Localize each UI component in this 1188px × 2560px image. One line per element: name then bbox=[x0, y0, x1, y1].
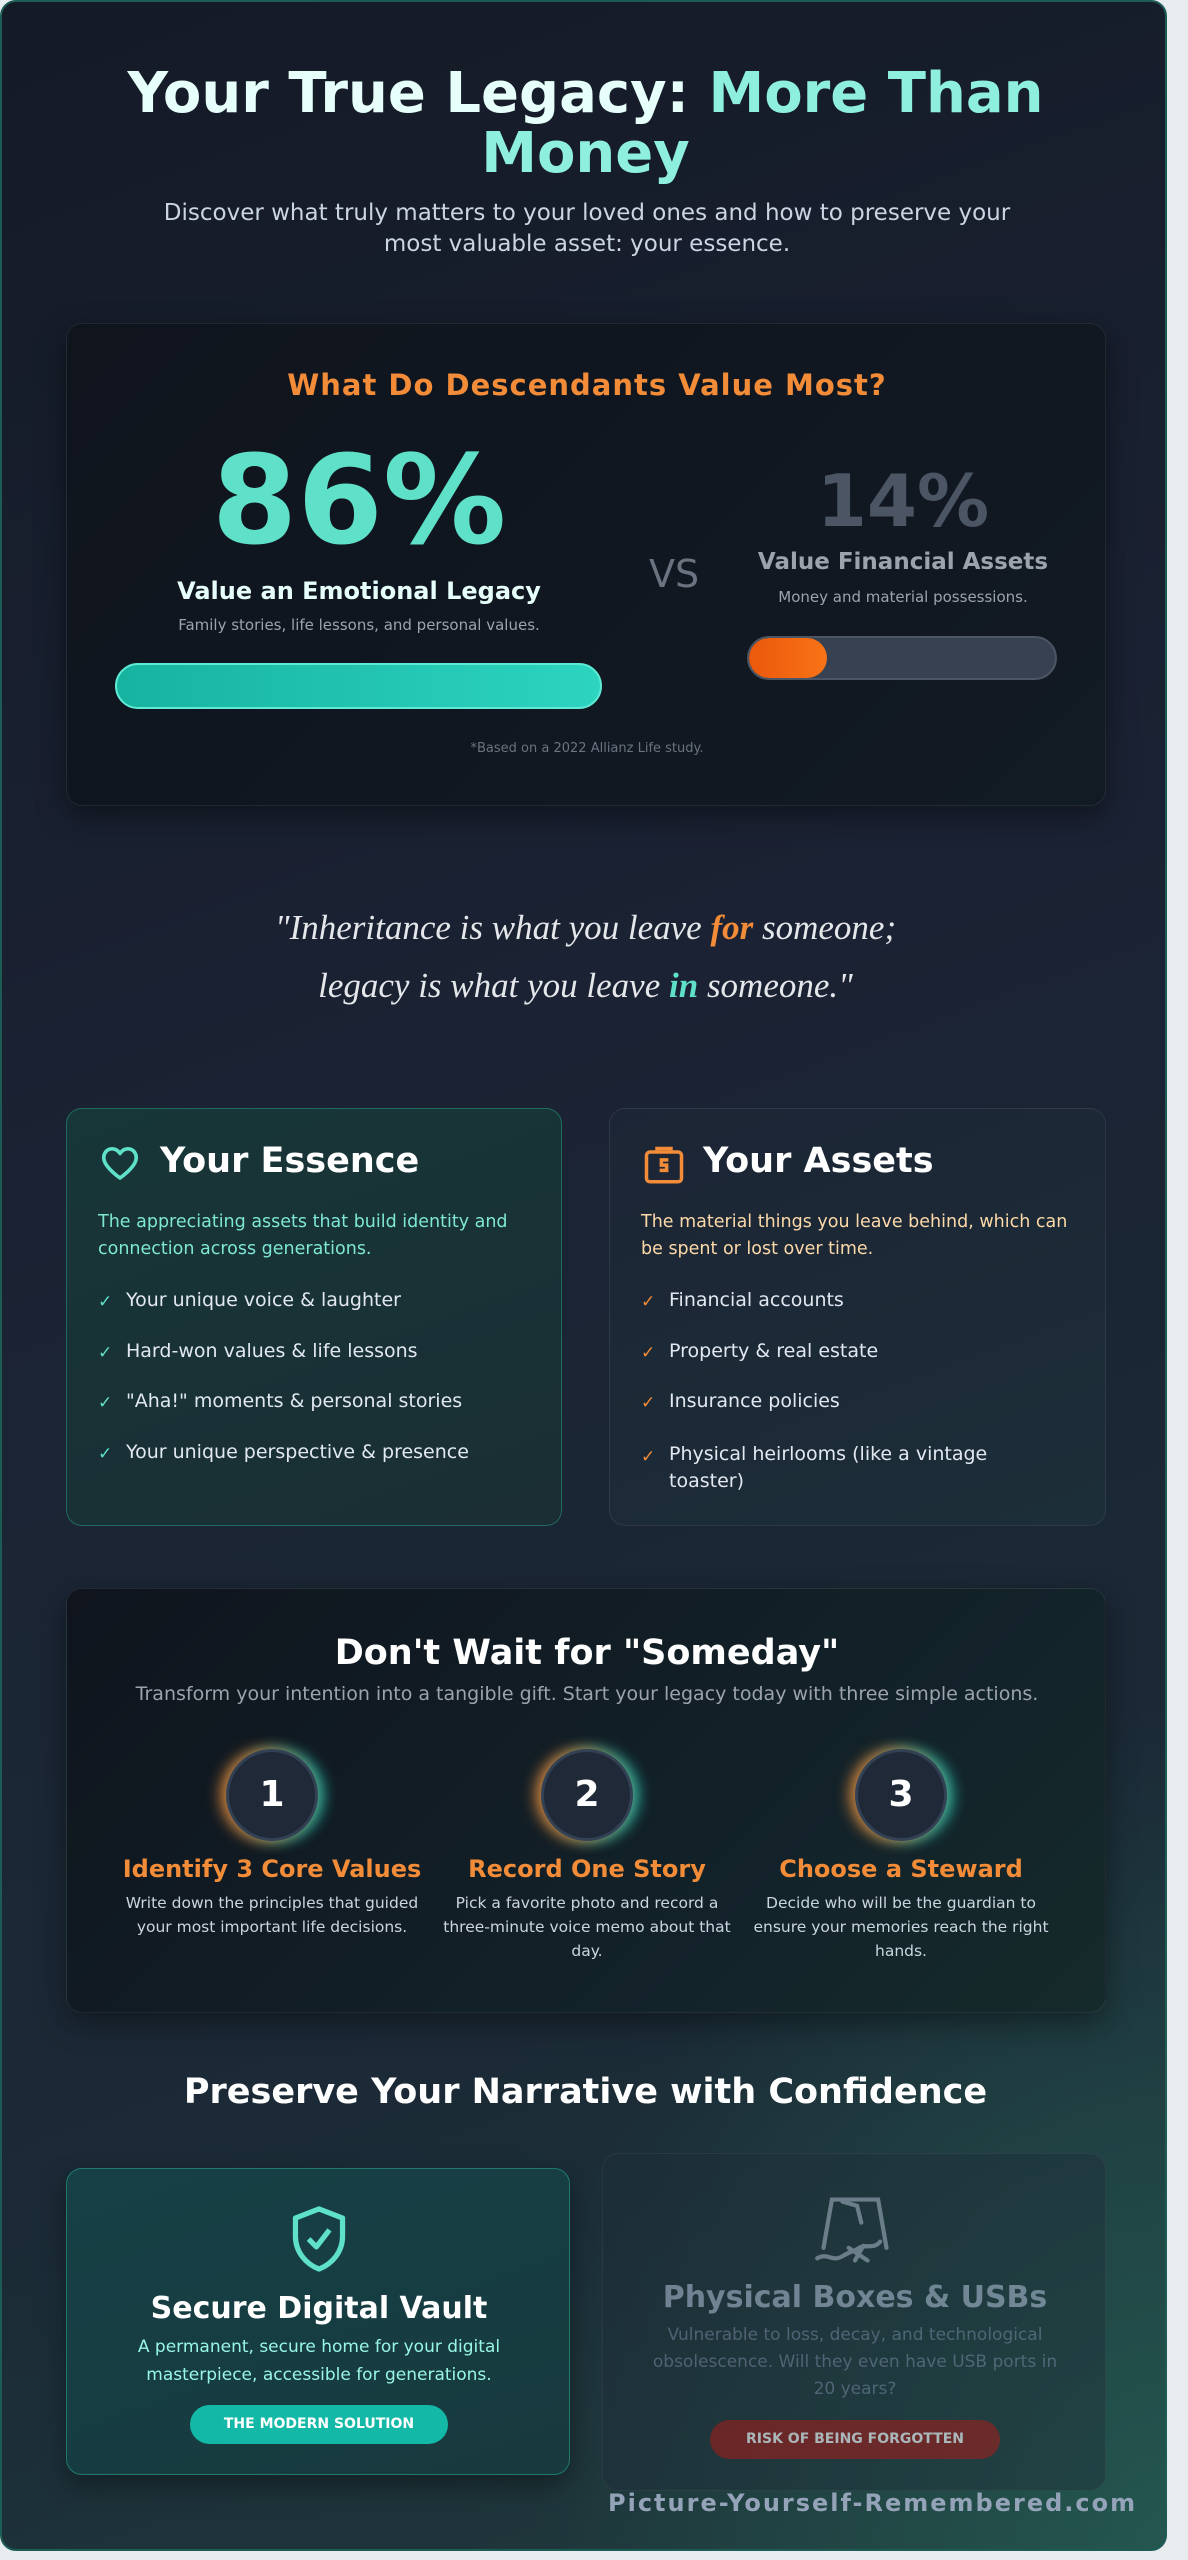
panel: your assets: ✓ bbox=[641, 1393, 655, 1413]
bar: 14 bbox=[747, 636, 1057, 680]
assets list: Financial accounts bbox=[669, 1289, 844, 1311]
panel: action steps bbox=[66, 1588, 1106, 2013]
label: emotional legacy: Value an Emotional Legacy bbox=[177, 577, 541, 605]
step 3: Choose a Steward bbox=[779, 1855, 1023, 1883]
step 1: 1 bbox=[259, 1774, 285, 1815]
icon: broken box bbox=[815, 2198, 889, 2262]
panel: your assets: ✓ bbox=[641, 1343, 655, 1363]
sub: emotional: Family stories, life lessons, and personal values. bbox=[178, 616, 540, 634]
assets list: Insurance policies bbox=[669, 1390, 840, 1412]
heading: assets: Your Assets bbox=[703, 1141, 934, 1181]
quote: "Inheritance is what you leave for someone; bbox=[275, 908, 896, 947]
step 1: Identify 3 Core Values bbox=[123, 1855, 421, 1883]
step 2: Pick a favorite photo and record a three-minute voice memo about that day. bbox=[443, 1894, 731, 1960]
physical title: Physical Boxes & USBs bbox=[663, 2280, 1047, 2315]
essence list: "Aha!" moments & personal stories bbox=[126, 1390, 462, 1412]
badge: modern solution: THE MODERN SOLUTION bbox=[224, 2416, 414, 2432]
icon: shield bbox=[292, 2206, 346, 2272]
panel: your essence: ✓ bbox=[98, 1393, 112, 1413]
title bbox=[127, 61, 1044, 186]
essence list: Your unique voice & laughter bbox=[126, 1289, 401, 1311]
assets description: The material things you leave behind, which can be spent or lost over time. bbox=[641, 1212, 1067, 1259]
badge: risk: RISK OF BEING FORGOTTEN bbox=[746, 2431, 964, 2447]
panel: your assets bbox=[609, 1108, 1106, 1526]
footnote: *Based on a 2022 Allianz Life study. bbox=[471, 741, 703, 756]
vs: VS bbox=[649, 552, 699, 596]
step 2 bbox=[443, 1738, 731, 1960]
heading: preserve: Preserve Your Narrative with Confidence bbox=[184, 2072, 987, 2112]
stat: 86%: 86% bbox=[212, 430, 506, 573]
icon: money bag bbox=[644, 1146, 684, 1184]
badge: modern solution bbox=[190, 2405, 448, 2444]
panel: stats comparison bbox=[66, 323, 1106, 806]
step 1 bbox=[123, 1738, 421, 1936]
assets list: Physical heirlooms (like a vintage toaster) bbox=[669, 1443, 987, 1492]
step 1: Write down the principles that guided your most important life decisions. bbox=[126, 1894, 418, 1936]
panel: your essence bbox=[66, 1108, 562, 1526]
vault title: Secure Digital Vault bbox=[151, 2291, 487, 2326]
panel: digital vault bbox=[66, 2168, 570, 2475]
vault description: A permanent, secure home for your digital masterpiece, accessible for generations. bbox=[138, 2337, 500, 2385]
title: Your True Legacy: More Than bbox=[127, 61, 1044, 126]
watermark: Picture-Yourself-Remembered.com bbox=[608, 2489, 1137, 2517]
assets list: Property & real estate bbox=[669, 1340, 878, 1362]
step 3: 3 bbox=[888, 1774, 914, 1815]
icon: heart bbox=[102, 1147, 138, 1180]
panel: your assets: ✓ bbox=[641, 1292, 655, 1312]
panel: your assets: ✓ bbox=[641, 1447, 655, 1467]
essence list: Your unique perspective & presence bbox=[126, 1441, 469, 1463]
badge: risk bbox=[710, 2420, 1000, 2459]
step 2: 2 bbox=[574, 1774, 600, 1815]
step 3 bbox=[753, 1738, 1049, 1960]
quote bbox=[275, 908, 896, 1005]
essence list bbox=[98, 1289, 469, 1464]
subtitle: Discover what truly matters to your loved ones and how to preserve your most valuable asset: your essence. bbox=[164, 200, 1010, 257]
steps subtitle: Transform your intention into a tangible gift. Start your legacy today with three simple actions. bbox=[136, 1683, 1038, 1705]
panel: your essence: ✓ bbox=[98, 1292, 112, 1312]
stats heading: What Do Descendants Value Most? bbox=[287, 368, 887, 402]
stat: 14%: 14% bbox=[817, 459, 989, 543]
step 2: Record One Story bbox=[468, 1855, 706, 1883]
panel: physical boxes bbox=[602, 2153, 1106, 2491]
assets list bbox=[641, 1289, 987, 1492]
step 3: Decide who will be the guardian to ensure your memories reach the right hands. bbox=[753, 1894, 1049, 1960]
heading: essence: Your Essence bbox=[160, 1141, 419, 1181]
essence list: Hard-won values & life lessons bbox=[126, 1340, 418, 1362]
physical description: Vulnerable to loss, decay, and technological obsolescence. Will they even have USB ports in 20 years? bbox=[653, 2325, 1057, 2399]
panel: your essence: ✓ bbox=[98, 1343, 112, 1363]
title: Money bbox=[481, 121, 690, 186]
sub: financial: Money and material possessions. bbox=[778, 588, 1028, 606]
quote: legacy is what you leave in someone." bbox=[318, 966, 853, 1005]
bar: 86 bbox=[115, 663, 602, 709]
steps heading: Don't Wait for "Someday" bbox=[335, 1633, 839, 1673]
essence description: The appreciating assets that build identity and connection across generations. bbox=[98, 1212, 508, 1259]
label: financial: Value Financial Assets bbox=[758, 549, 1048, 575]
panel: your essence: ✓ bbox=[98, 1444, 112, 1464]
